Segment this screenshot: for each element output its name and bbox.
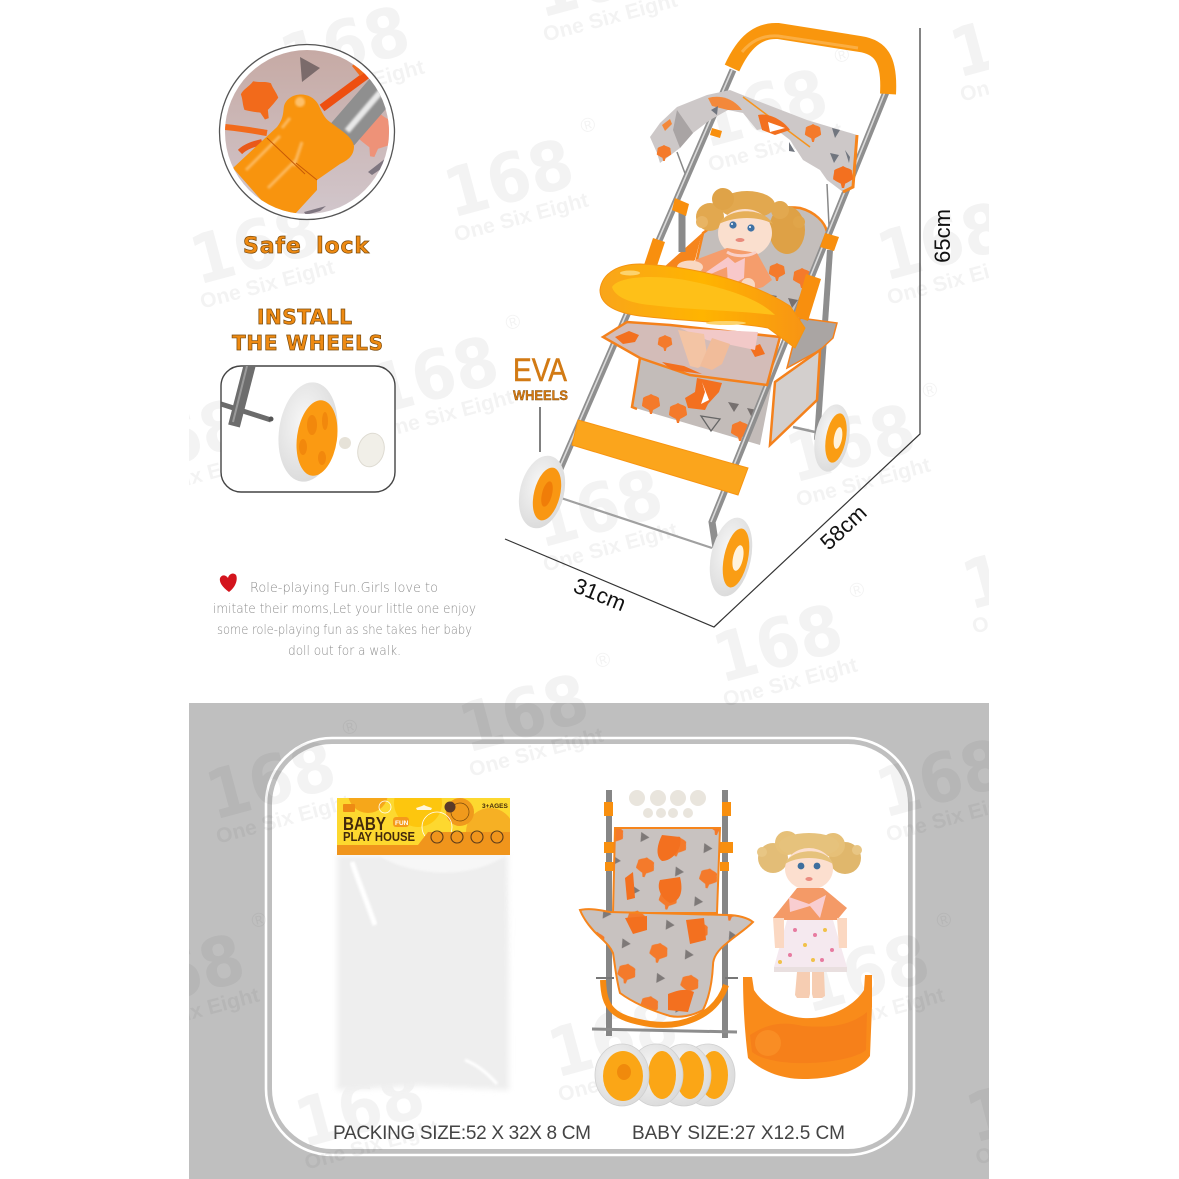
- cushion foxes: [625, 916, 706, 1012]
- product photo: stroller: [512, 31, 888, 600]
- watermarks: ®: [324, 180, 344, 205]
- label: 31cm: 31cm: [570, 573, 629, 616]
- watermarks: One Six Eight: [198, 256, 337, 314]
- watermarks: One Six Eight: [706, 119, 845, 177]
- packaging: disassembled stroller parts: [580, 790, 753, 1106]
- watermarks: [189, 0, 989, 1168]
- packaging: bag: [337, 773, 514, 1090]
- text block: role-playing description: Role-playing Fun.Girls love to: [250, 581, 438, 596]
- heading: EVA wheels: EVA: [513, 352, 568, 388]
- left rear tube: [678, 210, 686, 252]
- watermarks: One Six Eight: [556, 1049, 695, 1107]
- seat back: [663, 207, 827, 322]
- watermarks: One Six Eight: [884, 789, 1023, 847]
- watermarks: ®: [1011, 176, 1031, 201]
- bag header card: FUN: [395, 820, 409, 827]
- rear wheel: [793, 250, 855, 474]
- watermarks: One Six Eight: [541, 519, 680, 577]
- heading: EVA wheels: WHEELS: [513, 387, 568, 403]
- watermarks: 168: [525, 454, 671, 564]
- watermarks: One Six Eight: [958, 49, 1097, 107]
- four wheels: [595, 1044, 735, 1106]
- clips: [604, 802, 733, 871]
- heading: safe lock: Safe lock: [243, 234, 370, 259]
- fox print: [685, 378, 722, 410]
- watermarks: ®: [832, 43, 852, 68]
- handle: [732, 31, 888, 94]
- main frame tubes: [555, 70, 886, 548]
- watermarks: One Six Eight: [288, 56, 427, 114]
- text block: role-playing description: [213, 581, 476, 659]
- watermarks: ®: [503, 310, 523, 335]
- watermarks: ®: [249, 373, 269, 398]
- watermarks: 168: [868, 724, 1014, 834]
- big foxes: [625, 835, 681, 903]
- watermarks: One Six Eight: [302, 1117, 441, 1175]
- text block: role-playing description: some role-playing fun as she takes her baby: [217, 623, 472, 638]
- watermarks: One Six Eight: [970, 581, 1109, 639]
- canopy: [650, 90, 857, 192]
- watermarks: 168: [705, 589, 851, 699]
- bag body: [337, 855, 509, 1090]
- watermarks: 168: [361, 321, 507, 431]
- small disks: [629, 790, 706, 818]
- rod ends: [596, 977, 738, 979]
- doll: dress top: [677, 248, 772, 292]
- doll: dress skirt and legs: [678, 328, 758, 370]
- watermarks: 168: [954, 516, 1100, 626]
- watermarks: 168: [451, 659, 597, 769]
- tray: [600, 264, 805, 348]
- watermarks: One Six Eight: [123, 984, 262, 1042]
- U frame: [603, 980, 726, 1025]
- watermarks: 168: [107, 919, 253, 1029]
- watermarks: One Six Eight: [377, 386, 516, 444]
- heading: install the wheels: THE WHEELS: [232, 331, 383, 355]
- seat back: [613, 828, 720, 913]
- side tubes: [609, 790, 725, 1038]
- dimension lines: [505, 28, 920, 627]
- watermarks: One Six Eight: [973, 1112, 1112, 1170]
- watermarks: ®: [429, 1043, 449, 1068]
- watermarks: 168: [182, 191, 328, 301]
- watermarks: ®: [593, 648, 613, 673]
- text block: role-playing description: doll out for a walk.: [288, 644, 401, 659]
- bag header card: PLAY HOUSE: [343, 830, 415, 844]
- text: packing size: PACKING SIZE:52 X 32X 8 CM: [333, 1123, 591, 1144]
- seat cushion: [580, 909, 753, 1017]
- watermarks: 168: [436, 124, 582, 234]
- watermarks: ®: [340, 715, 360, 740]
- watermarks: 168: [869, 187, 1015, 297]
- heading: install the wheels: [232, 305, 383, 355]
- footrest: [572, 420, 748, 495]
- watermarks: 168: [198, 726, 344, 836]
- watermarks: 168: [690, 54, 836, 164]
- label: 58cm: 58cm: [815, 500, 872, 555]
- doll: hair and head: [696, 188, 805, 257]
- watermarks: One Six Eight: [721, 654, 860, 712]
- clips on frame: [643, 128, 839, 321]
- watermarks: 168: [107, 384, 253, 494]
- watermarks: One Six Eight: [123, 449, 262, 507]
- watermarks: One Six Eight: [452, 189, 591, 247]
- icon: heart: [220, 574, 237, 592]
- bag header card: 3+AGES: [482, 803, 508, 810]
- heading: EVA wheels: [513, 352, 568, 403]
- panel: wheel installation: [221, 364, 395, 492]
- watermarks: ®: [578, 113, 598, 138]
- basket: [632, 318, 837, 445]
- cross bar: [592, 1029, 737, 1032]
- watermarks: ®: [920, 378, 940, 403]
- text: baby size: BABY SIZE:27 X12.5 CM: [632, 1123, 845, 1144]
- cushion print: [615, 331, 765, 374]
- watermarks: ®: [847, 578, 867, 603]
- watermarks: 168: [792, 919, 938, 1029]
- heading: install the wheels: INSTALL: [257, 305, 352, 329]
- arrow: EVA pointer line: [539, 407, 541, 452]
- watermarks: One Six Eight: [214, 791, 353, 849]
- watermarks: ®: [934, 908, 954, 933]
- label: 65cm: 65cm: [930, 209, 955, 263]
- watermarks: ®: [667, 443, 687, 468]
- watermarks: 168: [958, 1049, 1104, 1159]
- text block: role-playing description: imitate their moms,Let your little one enjoy: [213, 602, 476, 617]
- canopy struts: [677, 152, 829, 226]
- packaging panel background: [189, 703, 989, 1179]
- watermarks: One Six Eight: [794, 454, 933, 512]
- watermarks: ®: [682, 973, 702, 998]
- bag header card: [337, 798, 510, 855]
- watermarks: ®: [249, 908, 269, 933]
- watermarks: 168: [540, 984, 686, 1094]
- watermarks: One Six Eight: [808, 984, 947, 1042]
- packaging: doll: [757, 831, 862, 998]
- watermarks: One Six Eight: [885, 252, 1024, 310]
- front wheels: [512, 451, 759, 600]
- watermarks: One Six Eight: [467, 724, 606, 782]
- packaging: tray: [743, 975, 872, 1079]
- watermarks: 168: [287, 1054, 433, 1164]
- watermarks: 168: [778, 389, 924, 499]
- lower seat cushion: [603, 322, 780, 385]
- bag header card: BABY: [343, 814, 386, 834]
- panel: safe lock circle: [220, 44, 400, 225]
